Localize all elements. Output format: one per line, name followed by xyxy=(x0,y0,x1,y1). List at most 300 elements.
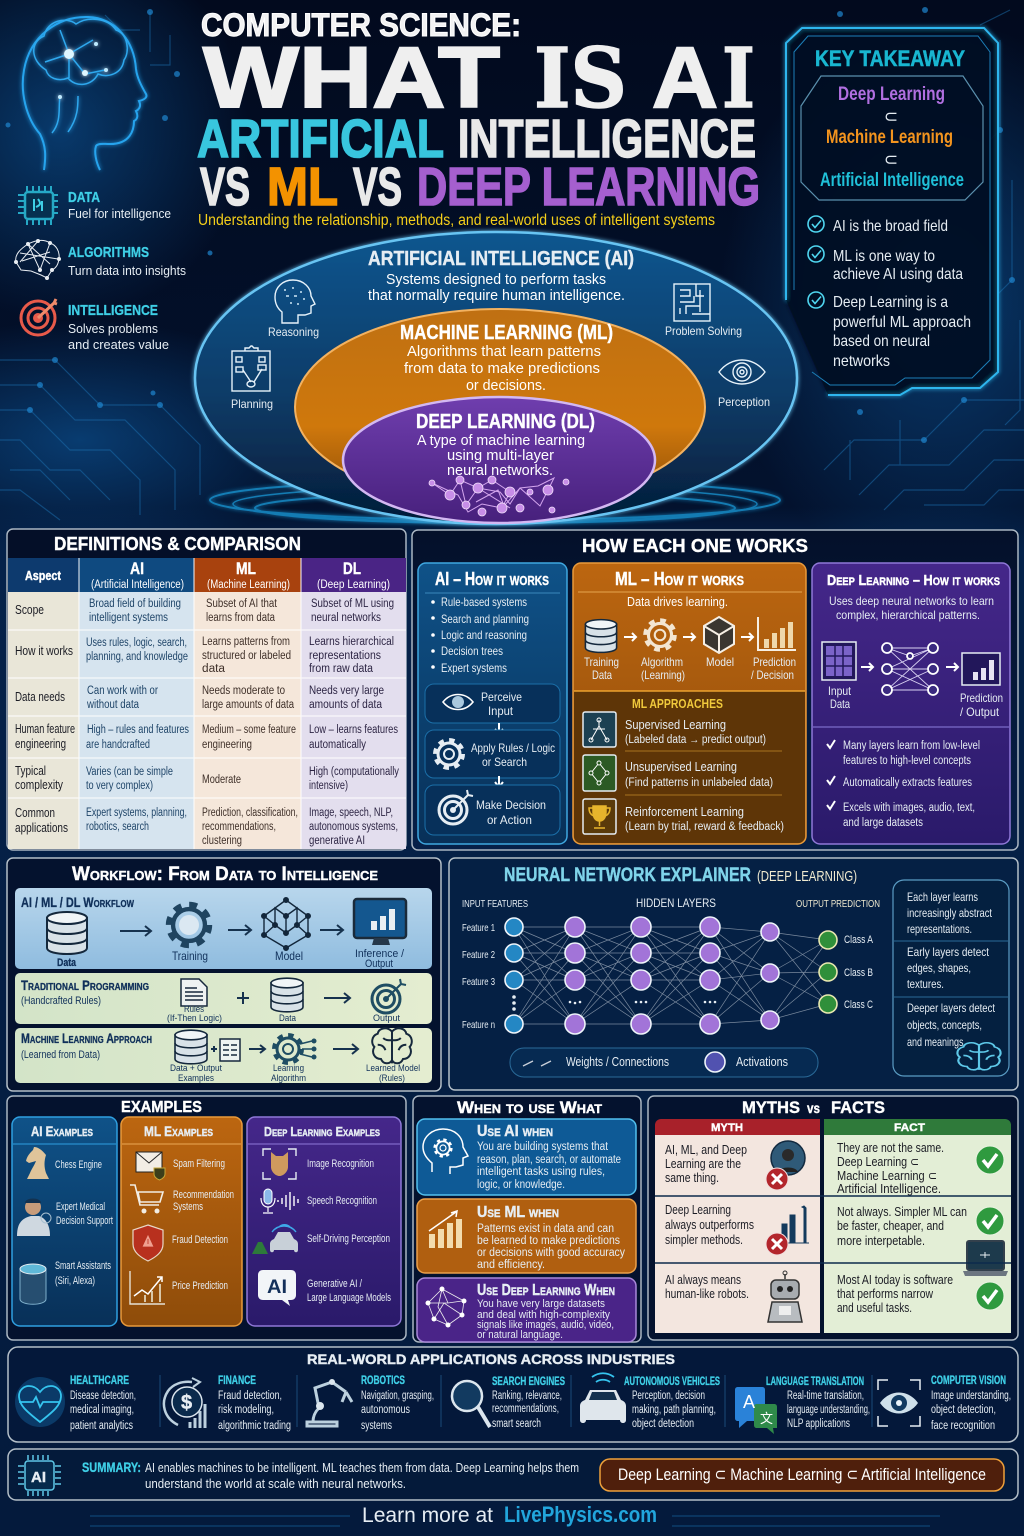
card: use ML when: Patterns exist in data and can xyxy=(477,1223,614,1235)
industry: computer vision: object detection, xyxy=(931,1404,996,1416)
explainer notes: Deeper layers detect xyxy=(907,1001,996,1015)
algorithms label: Turn data into insights xyxy=(68,263,186,278)
row: typical complexity: complexity xyxy=(15,778,64,792)
approach: reinforcement: (Learn by trial, reward & feedback) xyxy=(625,821,784,833)
concept: planning: Planning xyxy=(231,397,273,411)
industry: finance: risk modeling, xyxy=(218,1404,274,1416)
industry: autonomous vehicles: AUTONOMOUS VEHICLES xyxy=(624,1374,720,1388)
example: medical decision support xyxy=(17,1198,113,1236)
feature labels: Feature 1 xyxy=(462,922,495,934)
table header: DL xyxy=(343,559,361,578)
approach: unsupervised xyxy=(583,755,773,791)
row: how it works: planning, and knowledge xyxy=(86,651,188,663)
footer call to action xyxy=(90,1502,940,1527)
step: make decision: or Action xyxy=(487,813,532,827)
ML description xyxy=(404,343,601,394)
panel: neural network explainer xyxy=(449,858,1018,1090)
industry: finance: FINANCE xyxy=(218,1373,256,1387)
fact 1: Machine Learning ⊂ xyxy=(837,1168,937,1183)
row: human feature engineering: Low – learns features xyxy=(309,724,398,736)
row: common applications: Common xyxy=(15,806,55,820)
icon: AI chip xyxy=(18,1455,61,1496)
row: human feature engineering: High – rules and features xyxy=(87,724,189,736)
ML pipeline: Algorithm xyxy=(641,655,683,669)
industry: autonomous vehicles: making, path planning, xyxy=(632,1404,716,1416)
intelligence label: and creates value xyxy=(68,337,169,352)
card: use ML when: and efficiency. xyxy=(477,1259,545,1271)
row: scope: Subset of ML using xyxy=(311,598,394,610)
row: human feature engineering: are handcrafted xyxy=(86,739,150,751)
data label: DATA xyxy=(68,189,100,206)
main title: WHAT xyxy=(203,30,500,126)
card: use deep learning when xyxy=(417,1278,636,1342)
data label: Fuel for intelligence xyxy=(68,206,171,221)
row: typical complexity: Varies (can be simple xyxy=(86,766,173,778)
intelligence label: INTELLIGENCE xyxy=(68,302,158,319)
industry: language translation xyxy=(735,1374,870,1434)
explainer notes: Each layer learns xyxy=(907,890,978,904)
example: fraud detection xyxy=(133,1225,228,1261)
example: generative AI: Large Language Models xyxy=(307,1292,391,1304)
example: image recognition: Image Recognition xyxy=(307,1158,374,1170)
layer headings: OUTPUT PREDICTION xyxy=(796,898,880,910)
myth 1 xyxy=(665,1141,805,1190)
explainer notes: textures. xyxy=(907,977,944,991)
card: deep learning how it works xyxy=(812,563,1010,844)
row: AI ML DL workflow xyxy=(15,888,432,970)
summary text: SUMMARY: xyxy=(82,1459,141,1475)
DL checklist: Excels with images, audio, text, xyxy=(843,802,975,814)
concept: problem solving: Problem Solving xyxy=(665,324,742,338)
industry: language translation: Real-time translation, xyxy=(787,1390,864,1402)
row: human feature engineering: engineering xyxy=(15,737,66,751)
myth 3: AI always means xyxy=(665,1272,741,1287)
ML pipeline: / Decision xyxy=(751,668,794,682)
industry: robotics xyxy=(307,1373,434,1432)
takeaway checklist: based on neural xyxy=(833,333,930,350)
row: how it works: How it works xyxy=(15,643,73,658)
fact 1: Deep Learning ⊂ xyxy=(837,1154,919,1169)
row: machine learning approach: (Learned from Data) xyxy=(21,1049,100,1061)
subtitle: Understanding the relationship, methods, and real-world uses of intelligent systems xyxy=(198,212,715,229)
fact 3 xyxy=(837,1272,1004,1315)
layer headings xyxy=(462,896,880,910)
AI bullet list: Logic and reasoning xyxy=(441,628,527,642)
fact 1 xyxy=(837,1140,1004,1196)
concept: perception: Perception xyxy=(718,395,770,409)
row: typical complexity: Typical xyxy=(15,764,46,778)
icon: red target xyxy=(21,299,57,335)
row: how it works: data xyxy=(202,663,226,675)
summary text: understand the world at scale with neural networks. xyxy=(145,1476,406,1491)
main title: A xyxy=(652,30,718,126)
line: vs ml vs deep learning: VS xyxy=(353,157,402,217)
example: medical decision support: Decision Support xyxy=(56,1215,113,1227)
step: perceive input xyxy=(425,684,560,723)
row: AI ML DL workflow: Data xyxy=(57,957,77,969)
title block xyxy=(197,7,760,229)
takeaway checklist: achieve AI using data xyxy=(833,266,963,283)
ellipse: ML xyxy=(295,309,705,505)
heading: vs xyxy=(807,1100,820,1116)
layer headings: INPUT FEATURES xyxy=(462,898,528,910)
card: use AI when: reason, plan, search, or automate xyxy=(477,1154,621,1166)
row: common applications: Prediction, classification, xyxy=(202,807,298,819)
step: perceive input: Input xyxy=(488,704,514,718)
concept: perception xyxy=(718,360,770,409)
example: self-driving perception: Self-Driving Perception xyxy=(307,1233,390,1245)
row: traditional programming xyxy=(15,973,432,1024)
AI description xyxy=(368,271,625,304)
left feature list xyxy=(14,186,186,352)
card: use AI when: Use AI when xyxy=(477,1123,553,1140)
row: machine learning approach: Learned Model xyxy=(366,1063,420,1074)
card: deep learning examples: Deep Learning Examples xyxy=(264,1124,380,1139)
nesting box xyxy=(801,76,983,200)
row: typical complexity: Moderate xyxy=(202,774,241,786)
relationship pill xyxy=(600,1459,1004,1491)
footer call to action: LivePhysics.com xyxy=(504,1502,657,1527)
panel: how each one works xyxy=(412,530,1018,850)
card: ML how it works xyxy=(573,563,806,844)
DL pipeline xyxy=(822,642,1003,719)
example: spam filtering xyxy=(136,1152,225,1180)
DL description: using multi-layer xyxy=(447,447,554,464)
AI bullet list: Rule-based systems xyxy=(441,595,527,609)
table header: ML xyxy=(236,559,256,578)
row: common applications: applications xyxy=(15,821,68,835)
card: use deep learning when: Use Deep Learning When xyxy=(477,1282,615,1299)
approach: unsupervised: Unsupervised Learning xyxy=(625,759,737,774)
output nodes xyxy=(819,931,837,1013)
myth 2: simpler methods. xyxy=(665,1232,743,1247)
class labels: Class B xyxy=(844,967,873,979)
arrow down xyxy=(495,723,503,734)
myth 1: same thing. xyxy=(665,1170,719,1185)
industry: search engines: recommendations, xyxy=(492,1403,559,1415)
industry: search engines xyxy=(452,1374,565,1430)
fact 2: Not always. Simpler ML can xyxy=(837,1204,967,1219)
fact 3: Most AI today is software xyxy=(837,1272,953,1287)
row: human feature engineering: automatically xyxy=(309,739,366,751)
table header: (Artificial Intelligence) xyxy=(91,579,184,591)
row: human feature engineering: Human feature xyxy=(15,722,75,736)
ML pipeline: Training xyxy=(584,655,619,669)
intelligence label xyxy=(68,302,169,352)
explainer notes xyxy=(893,880,1009,1076)
line: vs ml vs deep learning: DEEP LEARNING xyxy=(417,157,760,217)
heading: REAL-WORLD APPLICATIONS ACROSS INDUSTRIES xyxy=(307,1351,675,1367)
row: AI ML DL workflow: Training xyxy=(172,949,208,963)
card: use deep learning when: and deal with high-complexity xyxy=(477,1309,610,1321)
DL intro xyxy=(829,594,994,622)
row: human feature engineering: engineering xyxy=(202,739,252,751)
example: price prediction: Price Prediction xyxy=(172,1280,228,1292)
industry: autonomous vehicles: Perception, decision xyxy=(632,1390,705,1402)
industry: robotics: systems xyxy=(361,1420,392,1432)
row: common applications: Image, speech, NLP, xyxy=(309,807,393,819)
row: machine learning approach: Machine Learning Approach xyxy=(21,1030,152,1046)
takeaway checklist xyxy=(808,216,971,370)
explainer notes: and meanings. xyxy=(907,1035,966,1049)
example: chess engine xyxy=(26,1147,102,1179)
row: how it works: structured or labeled xyxy=(202,650,291,662)
DL pipeline: Input xyxy=(828,684,852,698)
row: machine learning approach: (Rules) xyxy=(379,1073,405,1084)
card: deep learning examples xyxy=(247,1117,401,1326)
row: machine learning approach: Algorithm xyxy=(271,1073,306,1084)
line: vs ml vs deep learning: ML xyxy=(267,157,338,217)
heading: NEURAL NETWORK EXPLAINER xyxy=(504,865,751,886)
myth 2: Deep Learning xyxy=(665,1202,731,1217)
card: use deep learning when: You have very large datasets xyxy=(477,1298,605,1310)
DL pipeline: Data xyxy=(830,697,850,711)
row: common applications: recommendations, xyxy=(202,821,276,833)
DL description: neural networks. xyxy=(447,462,553,479)
table header: (Deep Learning) xyxy=(317,579,390,591)
explainer notes: Early layers detect xyxy=(907,945,990,959)
industry: autonomous vehicles: object detection xyxy=(632,1418,694,1430)
AI heading: ARTIFICIAL INTELLIGENCE (AI) xyxy=(368,248,634,270)
row: data needs: amounts of data xyxy=(309,699,383,711)
row: common applications: autonomous systems, xyxy=(309,821,398,833)
approach: reinforcement: Reinforcement Learning xyxy=(625,804,744,819)
heading: KEY TAKEAWAY xyxy=(815,46,965,71)
class labels: Class A xyxy=(844,934,874,946)
example: speech recognition xyxy=(261,1189,377,1213)
panel: summary xyxy=(8,1449,1018,1500)
example: recommendation systems: Systems xyxy=(173,1201,203,1213)
takeaway checklist: ML is one way to xyxy=(833,248,935,265)
class labels xyxy=(844,934,874,1011)
footer call to action: Learn more at xyxy=(362,1504,493,1527)
icon: AI chip: AI xyxy=(31,1469,46,1486)
ellipse: AI xyxy=(195,232,797,524)
industry: robotics: Navigation, grasping, xyxy=(361,1390,434,1402)
step: apply rules: or Search xyxy=(482,755,527,769)
card: AI examples: AI Examples xyxy=(31,1123,93,1139)
card: AI examples xyxy=(12,1117,117,1326)
industry: robotics: autonomous xyxy=(361,1404,410,1416)
DL checklist: and large datasets xyxy=(843,817,923,829)
myth 1: AI, ML, and Deep xyxy=(665,1142,747,1157)
row: machine learning approach xyxy=(15,1028,432,1084)
DL checklist: Many layers learn from low-level xyxy=(843,740,980,752)
row: data needs: without data xyxy=(86,699,140,711)
card: ML examples xyxy=(121,1117,242,1326)
line: vs ml vs deep learning: VS xyxy=(200,157,250,217)
row: how it works: from raw data xyxy=(309,663,374,675)
column: myth: MYTH xyxy=(711,1122,743,1134)
example: smart assistants: Smart Assistants xyxy=(55,1260,111,1272)
fact 2: be faster, cheaper, and xyxy=(837,1218,944,1233)
DL checklist: features to high-level concepts xyxy=(843,755,971,767)
nesting box: Artificial Intelligence xyxy=(820,170,964,191)
column: myth xyxy=(655,1119,820,1333)
table header: Aspect xyxy=(25,568,62,583)
explainer notes: increasingly abstract xyxy=(907,906,993,920)
legend: Weights / Connections xyxy=(566,1055,669,1069)
icon: glowing head with brain xyxy=(23,17,146,170)
panel: definitions and comparison xyxy=(7,529,406,850)
row: typical complexity: to very complex) xyxy=(86,780,153,792)
icon: network brain xyxy=(14,239,61,280)
approach: unsupervised: (Find patterns in unlabeled data) xyxy=(625,777,773,789)
example: speech recognition: Speech Recognition xyxy=(307,1195,377,1207)
fact 2 xyxy=(837,1204,1008,1276)
legend xyxy=(510,1048,818,1077)
row: data needs: Needs moderate to xyxy=(202,685,285,697)
industry: finance: Fraud detection, xyxy=(218,1390,282,1402)
example: smart assistants xyxy=(20,1260,111,1304)
DL heading: DEEP LEARNING (DL) xyxy=(416,411,595,433)
card: use AI when: You are building systems that xyxy=(477,1141,609,1153)
line: artificial intelligence: ARTIFICIAL xyxy=(197,109,444,169)
AI description: Systems designed to perform tasks xyxy=(386,271,606,288)
ML heading: MACHINE LEARNING (ML) xyxy=(400,322,613,344)
myth 3 xyxy=(665,1271,802,1322)
takeaway checklist: Deep Learning is a xyxy=(833,294,948,311)
row: scope: neural networks xyxy=(311,612,381,624)
row: data needs xyxy=(15,685,384,711)
AI bullet list: Decision trees xyxy=(441,644,503,658)
explainer notes: representations. xyxy=(907,922,972,936)
row: how it works: representations xyxy=(309,650,381,662)
concept: reasoning xyxy=(268,280,319,339)
explainer notes: objects, concepts, xyxy=(907,1018,982,1032)
approach: supervised: (Labeled data → predict output) xyxy=(625,734,766,746)
industry: healthcare: medical imaging, xyxy=(70,1404,134,1416)
fact 3: that performs narrow xyxy=(837,1286,933,1301)
example: generative AI: Generative AI / xyxy=(307,1278,363,1290)
kicker: COMPUTER SCIENCE: xyxy=(201,7,521,43)
heading: (DEEP LEARNING) xyxy=(757,868,857,885)
main title xyxy=(203,30,755,127)
DL pipeline: / Output xyxy=(960,705,1000,719)
row: scope xyxy=(15,598,394,624)
example: spam filtering: Spam Filtering xyxy=(173,1158,225,1170)
input nodes xyxy=(505,918,523,1033)
approach: reinforcement xyxy=(583,799,784,834)
panel: key takeaway xyxy=(786,28,998,395)
row: AI ML DL workflow: Inference / xyxy=(355,948,405,960)
panel: examples xyxy=(7,1096,406,1340)
row: how it works xyxy=(15,636,394,675)
card: use AI when xyxy=(417,1119,636,1195)
industry: language translation: NLP applications xyxy=(787,1418,850,1430)
industry: search engines: Ranking, relevance, xyxy=(492,1390,562,1402)
DL pipeline: Prediction xyxy=(960,691,1003,705)
feature labels: Feature 2 xyxy=(462,949,495,961)
industry: computer vision xyxy=(878,1373,1011,1432)
fact 1: Artificial Intelligence. xyxy=(837,1181,941,1196)
hidden nodes xyxy=(565,917,779,1034)
comparison table xyxy=(8,558,406,849)
network diagram xyxy=(462,917,874,1034)
row: how it works: Learns patterns from xyxy=(202,636,290,648)
example: recommendation systems xyxy=(130,1185,234,1214)
DL intro: Uses deep neural networks to learn xyxy=(829,594,994,608)
row: common applications: Expert systems, planning, xyxy=(86,807,187,819)
row: how it works: Uses rules, logic, search, xyxy=(86,637,187,649)
line: vs ml vs deep learning xyxy=(200,157,760,217)
step: apply rules xyxy=(425,730,560,778)
industry: language translation: LANGUAGE TRANSLATION xyxy=(766,1374,864,1388)
example: recommendation systems: Recommendation xyxy=(173,1189,234,1201)
industry: finance: $ xyxy=(181,1392,192,1414)
example: smart assistants: (Siri, Alexa) xyxy=(55,1275,95,1287)
card: use ML when: or decisions with good accuracy xyxy=(477,1247,625,1259)
ML pipeline xyxy=(584,617,796,682)
ML description: from data to make predictions xyxy=(404,360,600,377)
example: image recognition xyxy=(263,1149,374,1179)
row: typical complexity: High (computationally xyxy=(309,766,399,778)
panel: myths vs facts xyxy=(648,1096,1018,1340)
industry: robotics: ROBOTICS xyxy=(361,1373,405,1387)
row: scope: Broad field of building xyxy=(89,598,181,610)
panel: when to use what xyxy=(413,1096,641,1342)
example: fraud detection: Fraud Detection xyxy=(172,1234,228,1246)
class labels: Class C xyxy=(844,999,873,1011)
row: traditional programming: (Handcrafted Rules) xyxy=(21,995,101,1007)
row: common applications: robotics, search xyxy=(86,821,149,833)
heading: EXAMPLES xyxy=(121,1099,202,1116)
icon: chip xyxy=(18,186,58,225)
row: typical complexity: intensive) xyxy=(309,780,348,792)
card: use ML when xyxy=(417,1199,636,1273)
example: chess engine: Chess Engine xyxy=(55,1159,102,1171)
card title: AI – How it works xyxy=(435,569,549,589)
row: traditional programming: Rules xyxy=(184,1004,204,1014)
feature labels: Feature 3 xyxy=(462,976,495,988)
heading: MYTHS xyxy=(742,1098,800,1117)
step: make decision xyxy=(425,785,560,835)
industry: healthcare: patient analytics xyxy=(70,1420,133,1432)
nesting box: Deep Learning xyxy=(838,84,945,105)
table header: (Machine Learning) xyxy=(207,579,290,591)
row: machine learning approach: Learning xyxy=(273,1063,304,1074)
ML pipeline: Data xyxy=(592,668,612,682)
layer headings: HIDDEN LAYERS xyxy=(636,896,716,910)
industry: language translation: language understanding, xyxy=(787,1404,870,1416)
takeaway checklist: AI is the broad field xyxy=(833,218,948,235)
row: data needs: Data needs xyxy=(15,689,65,704)
row: AI ML DL workflow: AI / ML / DL Workflow xyxy=(21,894,134,910)
industry: finance: algorithmic trading xyxy=(218,1420,291,1432)
DL description xyxy=(417,432,585,479)
example: medical decision support: Expert Medical xyxy=(56,1201,105,1213)
row: scope: Subset of AI that xyxy=(206,598,278,610)
card: AI how it works xyxy=(418,563,567,844)
fact 1: They are not the same. xyxy=(837,1140,944,1155)
card: use AI when: logic, or knowledge. xyxy=(477,1179,565,1191)
summary text: AI enables machines to be intelligent. ML teaches them from data. Deep Learning helps them xyxy=(145,1460,579,1475)
nesting box: ⊂ xyxy=(884,107,898,126)
main title: I xyxy=(722,31,755,127)
ML approaches heading: ML APPROACHES xyxy=(632,697,723,711)
example: generative AI xyxy=(258,1270,391,1306)
row: typical complexity xyxy=(15,764,399,792)
industry: search engines: smart search xyxy=(492,1418,541,1430)
row: traditional programming: Data xyxy=(279,1013,297,1024)
intelligence label: Solves problems xyxy=(68,321,158,336)
ellipse: DL xyxy=(343,397,655,523)
DL checklist: Automatically extracts features xyxy=(843,777,972,789)
industry: search engines: SEARCH ENGINES xyxy=(492,1374,565,1388)
row: machine learning approach: Examples xyxy=(178,1073,214,1084)
card: use ML when: Use ML when xyxy=(477,1204,559,1221)
step: apply rules: Apply Rules / Logic xyxy=(471,741,555,755)
